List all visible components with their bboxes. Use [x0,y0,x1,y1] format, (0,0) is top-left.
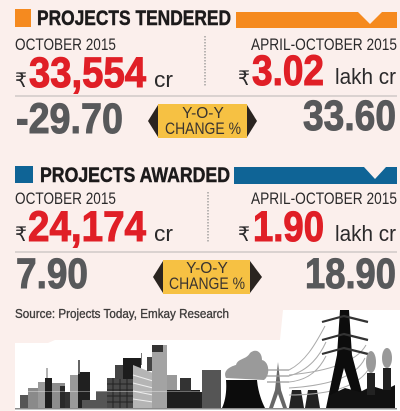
value: 3.02 lakh cr: lakh cr [335,64,396,89]
badge: y-o-y change: CHANGE % [165,119,241,138]
illustration: power plant and pylons [200,310,395,408]
value: 3.02 lakh cr: 3.02 [252,47,324,95]
badge: y-o-y change: Y-O-Y [182,105,224,122]
source note: Source: Projects Today, Emkay Research [15,306,229,321]
value: 1.90 lakh cr [238,203,396,251]
value: 33,554 cr: ₹ [15,70,27,92]
label: october 2015: OCTOBER 2015 [15,190,116,208]
divider [204,36,206,87]
cooling tower [222,380,265,408]
heading: projects tendered: PROJECTS TENDERED [37,6,231,30]
heading bar: orange [236,12,397,28]
value: 24,174 cr: 24,174 [28,203,146,251]
value: 33,554 cr: cr [154,67,173,92]
value: 1.90 lakh cr: ₹ [238,224,250,246]
heading: projects awarded: PROJECTS AWARDED [40,163,230,187]
panel: projects awarded [15,163,397,298]
icon: blue square [15,166,33,183]
wires [289,326,368,395]
factory [330,385,395,408]
smoke [225,351,268,380]
divider [207,192,209,243]
value: 7.90: 7.90 [16,250,88,298]
illustration: city skyline [15,345,200,408]
panel: projects tendered [15,6,397,143]
value: 1.90 lakh cr: lakh cr [335,221,396,246]
value: 1.90 lakh cr: 1.90 [253,203,324,251]
value: -29.70: -29.70 [16,95,123,143]
heading bar: blue [234,167,397,184]
small towers [289,390,304,408]
value: 33,554 cr: 33,554 [29,49,146,97]
value: 24,174 cr: cr [154,221,173,246]
badge: y-o-y change [148,104,257,138]
badge: y-o-y change [153,260,262,294]
icon: orange square [15,9,31,27]
value: 3.02 lakh cr: ₹ [238,68,250,90]
badge: y-o-y change: Y-O-Y [186,260,228,277]
badge: y-o-y change: CHANGE % [169,274,245,293]
value: 3.02 lakh cr [238,47,396,95]
label: october 2015: OCTOBER 2015 [15,36,116,54]
small pylon [269,362,287,408]
large pylon [326,310,366,408]
chimneys [367,373,375,395]
value: 24,174 cr: ₹ [15,224,27,246]
